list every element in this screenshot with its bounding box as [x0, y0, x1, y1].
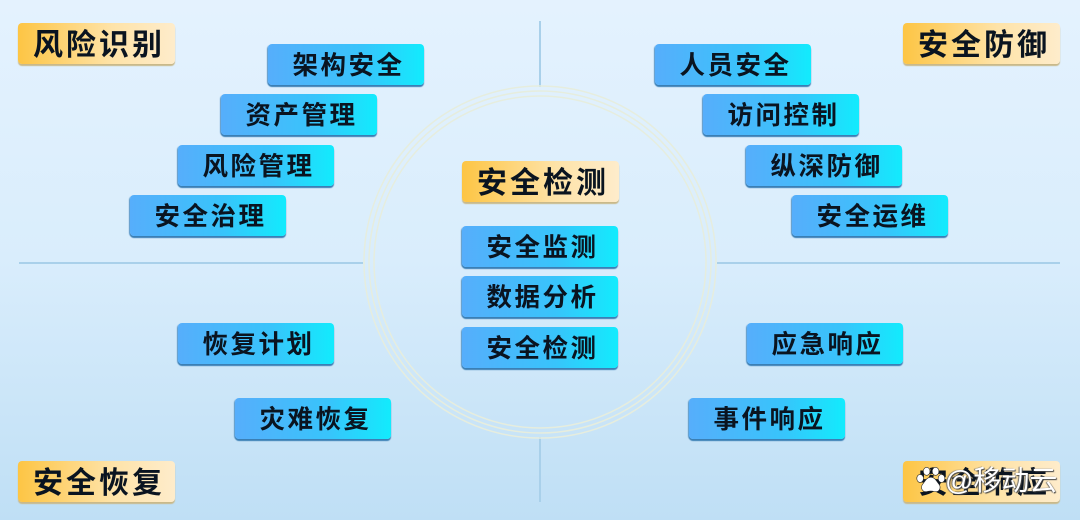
heading: 安全恢复: 安全恢复 — [33, 467, 165, 500]
item: 事件响应: 事件响应 — [713, 406, 826, 434]
item: 安全检测 — [462, 327, 618, 368]
item: 应急响应 — [747, 323, 903, 364]
item: 数据分析: 数据分析 — [486, 284, 598, 312]
item: 安全治理: 安全治理 — [154, 203, 266, 231]
item: 资产管理: 资产管理 — [245, 102, 358, 130]
item: 恢复计划 — [178, 323, 334, 364]
heading: 安全防御 — [903, 23, 1060, 64]
item: 安全监测: 安全监测 — [486, 234, 598, 262]
item: 风险管理 — [178, 145, 334, 186]
item: 访问控制: 访问控制 — [727, 102, 840, 130]
heading: 安全响应 with watermark overlap — [903, 461, 1060, 502]
item: 安全治理 — [130, 195, 286, 236]
item: 纵深防御: 纵深防御 — [770, 153, 882, 181]
item: 数据分析 — [462, 276, 618, 317]
item: 事件响应 — [689, 398, 845, 439]
heading: 安全防御: 安全防御 — [918, 29, 1050, 62]
item: 安全检测: 安全检测 — [486, 335, 598, 363]
heading: 安全恢复 — [18, 461, 175, 502]
item: 资产管理 — [221, 94, 377, 135]
item: 安全监测 — [462, 226, 618, 267]
item: 应急响应: 应急响应 — [771, 331, 884, 359]
item: 灾难恢复 — [235, 398, 391, 439]
heading: 安全检测: 安全检测 — [477, 167, 609, 200]
item: 安全运维 — [792, 195, 948, 236]
item: 安全运维: 安全运维 — [816, 203, 928, 231]
heading: 风险识别 — [18, 23, 175, 64]
icon: watermark paw — [916, 467, 946, 492]
item: 人员安全: 人员安全 — [679, 52, 792, 80]
heading: 风险识别: 风险识别 — [33, 29, 165, 62]
heading: 安全检测 — [462, 161, 619, 202]
item: 人员安全 — [655, 44, 811, 85]
item: 纵深防御 — [746, 145, 902, 186]
heading: 安全响应 with watermark overlap: 安全响应 — [918, 467, 1050, 500]
watermark text: @移动云 — [945, 465, 1057, 496]
item: 灾难恢复: 灾难恢复 — [259, 406, 372, 434]
item: 架构安全: 架构安全 — [292, 52, 404, 80]
item: 风险管理: 风险管理 — [202, 153, 314, 181]
item: 访问控制 — [703, 94, 859, 135]
item: 架构安全 — [268, 44, 424, 85]
item: 恢复计划: 恢复计划 — [202, 331, 314, 359]
